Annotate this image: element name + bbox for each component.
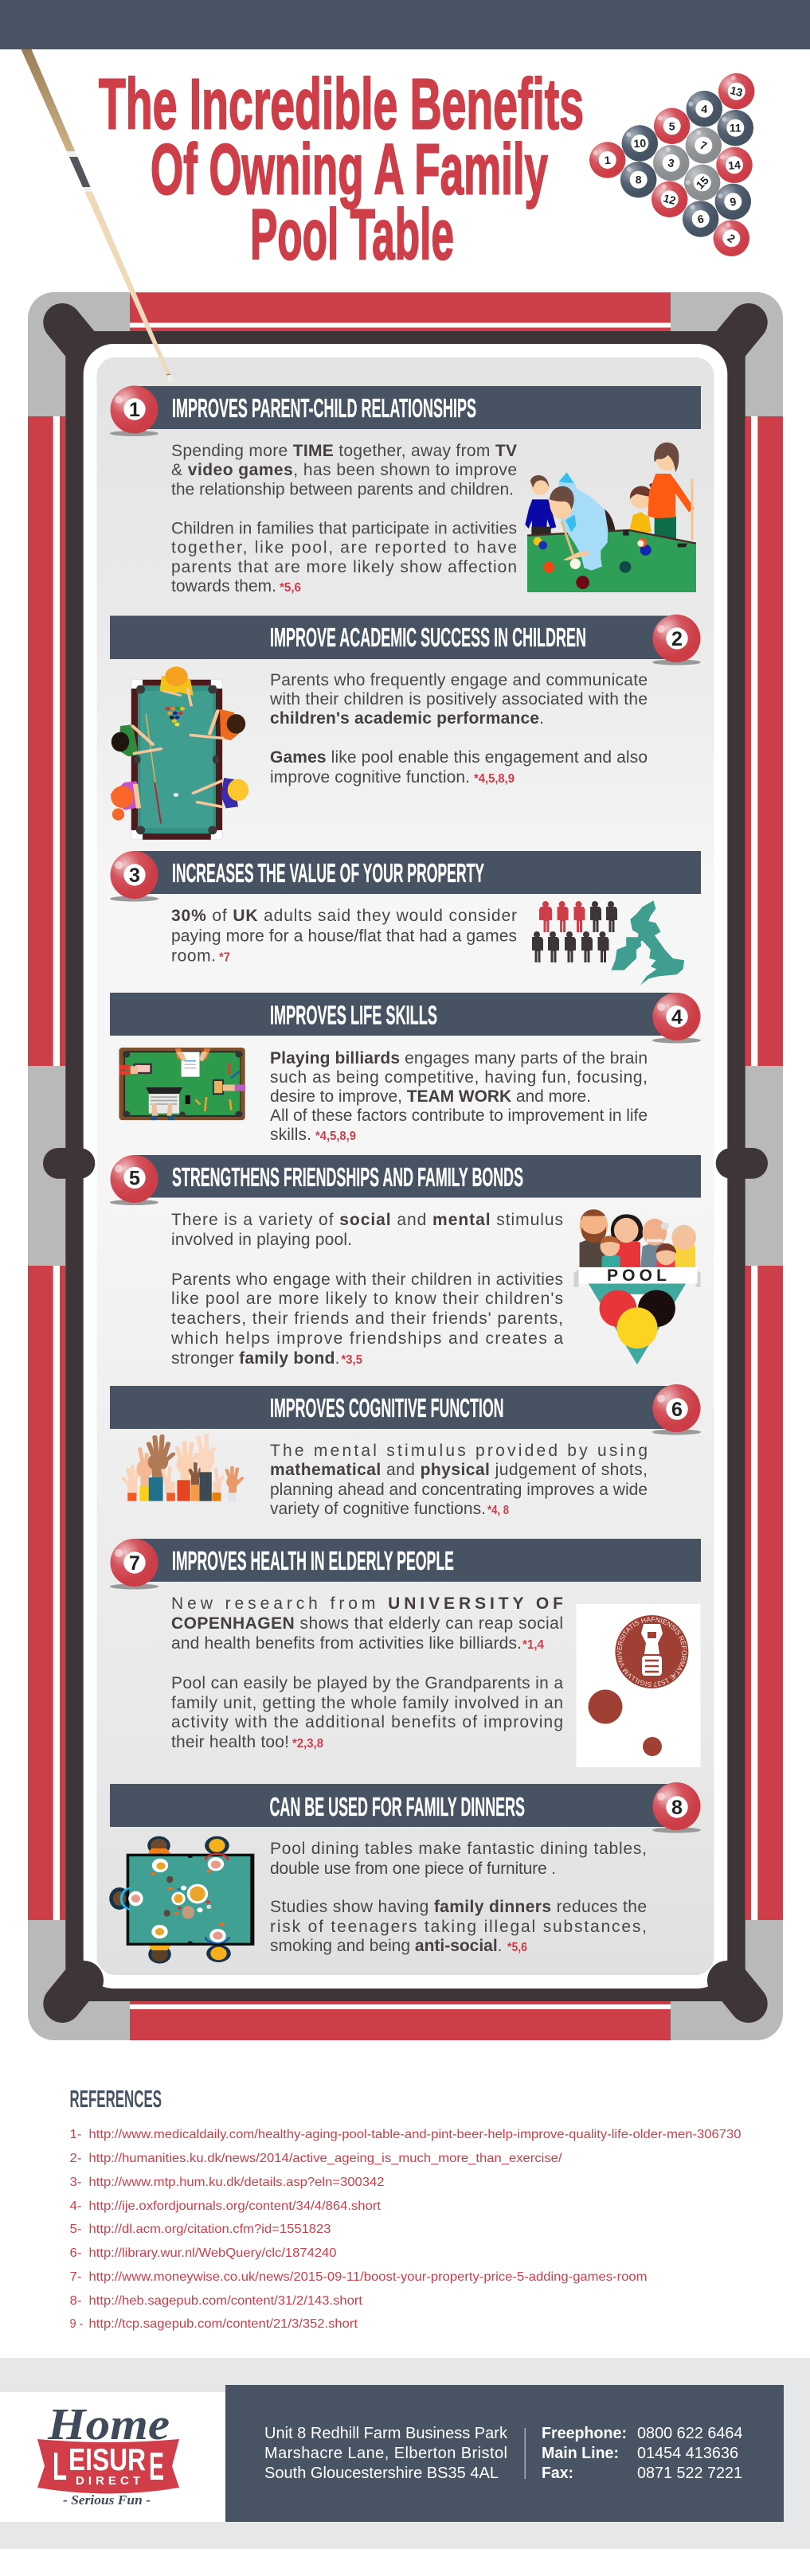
icon: ten people, three highlighted xyxy=(532,901,617,962)
text block: section 7 copy: family unit, getting the whole family involved in an xyxy=(171,1694,563,1712)
text block: section 2 copy: improve cognitive function. xyxy=(270,768,470,786)
icon: rack of fifteen pool balls: 8 xyxy=(636,174,642,186)
logo: Home Leisure Direct: - Serious Fun - xyxy=(63,2492,151,2508)
icon: rack of fifteen pool balls: 9 xyxy=(729,195,738,209)
text block: section 5 copy: stronger family bond. xyxy=(171,1349,339,1368)
text block: section 2 copy xyxy=(269,671,648,786)
text block: section 1 copy: towards them. xyxy=(171,577,276,595)
icon: rack of fifteen pool balls: 14 xyxy=(728,158,742,172)
text block: section 5 copy xyxy=(170,1211,563,1368)
heading bar 7 xyxy=(134,1539,701,1582)
heading bar 1: IMPROVES PARENT-CHILD RELATIONSHIPS xyxy=(172,393,476,423)
panel: pool table frame xyxy=(28,292,783,2040)
references list: 4- xyxy=(70,2199,81,2213)
text block: section 7 copy: *2,3,8 xyxy=(292,1737,323,1751)
text block: section 5 copy: which helps improve friendships and creates a xyxy=(170,1329,563,1348)
text block: section 5 copy: like pool are more likely to know their children's xyxy=(171,1290,563,1308)
references list: 1- xyxy=(70,2128,81,2141)
text block: section 5 copy: teachers, their friends and their friends' parents, xyxy=(171,1309,563,1328)
heading bar 3 xyxy=(134,851,701,894)
text block: section 2 copy: *4,5,8,9 xyxy=(474,772,515,786)
phone numbers: 0800 622 6464 xyxy=(637,2425,742,2442)
icon: ball 2 xyxy=(652,615,701,665)
icon: ball 5: 5 xyxy=(129,1167,140,1189)
references list: 7- xyxy=(70,2270,81,2284)
logo: Home Leisure Direct xyxy=(0,2392,225,2522)
icon: rack of fifteen pool balls: 3 xyxy=(667,156,676,170)
references xyxy=(70,2085,742,2331)
references list: 5- xyxy=(70,2223,81,2236)
icon: ball 6 xyxy=(652,1384,701,1434)
text block: section 6 copy xyxy=(270,1442,648,1518)
address: Unit 8 Redhill Farm Business Park xyxy=(264,2425,508,2442)
logo: Home Leisure Direct: E xyxy=(149,2445,164,2488)
text block: section 5 copy: *3,5 xyxy=(341,1353,362,1367)
text block: section 7 copy: COPENHAGEN shows that elderly can reap social xyxy=(171,1614,563,1633)
top banner bar xyxy=(0,0,810,49)
illustration: working on a pool table xyxy=(119,1048,245,1120)
text block: section 7 copy: and health benefits from activities like billiards. xyxy=(171,1634,522,1653)
heading bar 6 xyxy=(110,1386,677,1429)
phone numbers: 0871 522 7221 xyxy=(637,2465,742,2482)
icon: rack of fifteen pool balls: 12 xyxy=(662,192,677,207)
references list: http://www.medicaldaily.com/healthy-aging-pool-table-and-pint-beer-help-improve-quality-life-older-men-306730 xyxy=(89,2128,742,2141)
text block: section 7 copy: Pool can easily be played by the Grandparents in a xyxy=(171,1674,563,1692)
text block: section 4 copy: Playing billiards engages many parts of the brain xyxy=(270,1049,648,1067)
footer xyxy=(0,2358,810,2549)
text block: section 7 copy: activity with the additional benefits of improving xyxy=(171,1713,563,1731)
icon: rack of fifteen pool balls: 10 xyxy=(633,137,647,150)
references list: 2- xyxy=(70,2152,81,2165)
icon: rack of fifteen pool balls: 4 xyxy=(701,102,708,115)
illustration: family dining at pool table xyxy=(109,1836,254,1964)
references list: 6- xyxy=(70,2246,81,2260)
panel: section 4 life skills xyxy=(110,993,701,1144)
text block: section 5 copy: involved in playing pool. xyxy=(171,1231,352,1249)
references list: http://ije.oxfordjournals.org/content/34/4/864.short xyxy=(89,2199,382,2213)
icon: ball 6: 6 xyxy=(671,1399,683,1421)
contact panel xyxy=(225,2385,784,2522)
text block: section 7 copy: New research from UNIVERSITY OF xyxy=(171,1594,563,1613)
address: Marshacre Lane, Elberton Bristol xyxy=(264,2445,507,2462)
icon: ball 2: 2 xyxy=(671,628,683,650)
text block: section 7 copy xyxy=(171,1594,563,1751)
text block: section 6 copy: *4, 8 xyxy=(487,1504,509,1517)
address xyxy=(264,2425,508,2482)
icon: ball 3: 3 xyxy=(129,865,140,887)
icon: rack of fifteen pool balls: 15 xyxy=(694,174,711,191)
heading bar 1 xyxy=(134,386,701,429)
icon: ball 7 xyxy=(110,1539,158,1589)
text block: section 7 copy: *1,4 xyxy=(522,1638,544,1652)
references list: http://humanities.ku.dk/news/2014/active_ageing_is_much_more_than_exercise/ xyxy=(89,2152,562,2165)
illustration: raised hands xyxy=(123,1435,242,1501)
label: POOL: POOL xyxy=(607,1267,667,1285)
icon: rack of fifteen pool balls: 5 xyxy=(669,119,675,132)
text block: section 2 copy: Parents who frequently engage and communicate xyxy=(270,671,648,689)
phone numbers: 01454 413636 xyxy=(637,2445,738,2462)
icon: pool cue xyxy=(21,49,174,382)
icon: University of Copenhagen seal: SIGILLVM VNIVERSITATIS HAFNIENSIS REFORMATÆ 1537 xyxy=(616,1617,687,1687)
text block: section 1 copy: the relationship between parents and children. xyxy=(171,481,514,498)
icon: ball 4: 4 xyxy=(671,1006,683,1028)
heading bar 8: CAN BE USED FOR FAMILY DINNERS xyxy=(269,1792,525,1821)
logo: Home Leisure Direct: Home xyxy=(47,2400,170,2449)
text block: section 8 copy: Studies show having family dinners reduces the xyxy=(270,1898,647,1916)
logo: Home Leisure Direct: EISUR xyxy=(68,2443,146,2477)
icon: rack of fifteen pool balls: 6 xyxy=(696,212,705,226)
text block: section 4 copy: All of these factors contribute to improvement in life xyxy=(270,1107,648,1125)
illustration: top view of family around pool table xyxy=(110,666,248,840)
text block: section 4 copy: such as being competitive, having fun, focusing, xyxy=(270,1068,648,1087)
heading bar 3: INCREASES THE VALUE OF YOUR PROPERTY xyxy=(172,858,484,888)
icon: ball 4 xyxy=(652,993,701,1043)
text block: section 3 copy: 30% of UK adults said they would consider xyxy=(171,907,517,925)
text block: section 3 copy: paying more for a house/flat that had a games xyxy=(171,927,517,946)
icon: rack of fifteen pool balls: 11 xyxy=(730,122,742,135)
text block: section 8 copy: risk of teenagers taking illegal substances, xyxy=(270,1918,647,1936)
references list: http://library.wur.nl/WebQuery/clc/1874240 xyxy=(89,2246,337,2260)
address: South Gloucestershire BS35 4AL xyxy=(264,2465,499,2482)
text block: section 7 copy: their health too! xyxy=(171,1733,289,1751)
text block: section 6 copy: mathematical and physical judgement of shots, xyxy=(270,1461,648,1479)
icon: ball 1: 1 xyxy=(129,399,140,421)
illustration: family playing pool xyxy=(525,443,696,592)
logo: Home Leisure Direct: L xyxy=(53,2445,67,2488)
panel: section 1 parent-child relationships xyxy=(110,385,701,595)
text block: section 8 copy: Pool dining tables make fantastic dining tables, xyxy=(270,1840,647,1858)
text block: section 1 copy: parents that are more likely show affection xyxy=(171,558,517,576)
references list: 3- xyxy=(70,2176,81,2189)
icon: rack of fifteen pool balls xyxy=(589,73,754,256)
text block: section 4 copy: *4,5,8,9 xyxy=(315,1130,356,1143)
illustration: family with pool logo xyxy=(573,1209,701,1364)
icon: ball 1 xyxy=(110,385,158,436)
text block: section 4 copy: desire to improve, TEAM WORK and more. xyxy=(270,1087,591,1106)
panel: section 7 elderly health xyxy=(110,1539,701,1767)
heading bar 4: IMPROVES LIFE SKILLS xyxy=(270,1000,437,1030)
heading bar 8 xyxy=(110,1784,677,1827)
references list: http://www.moneywise.co.uk/news/2015-09-11/boost-your-property-price-5-adding-games-room xyxy=(89,2270,647,2284)
text block: section 3 copy xyxy=(171,907,517,966)
icon: ball 8: 8 xyxy=(671,1797,683,1819)
text block: section 8 copy: *5,6 xyxy=(507,1941,527,1954)
title: Pool Table xyxy=(250,196,454,275)
heading bar 7: IMPROVES HEALTH IN ELDERLY PEOPLE xyxy=(172,1546,454,1575)
icon: rack of fifteen pool balls: 13 xyxy=(729,84,744,99)
text block: section 6 copy: variety of cognitive functions. xyxy=(270,1500,486,1518)
text block: section 2 copy: children's academic performance. xyxy=(270,709,544,728)
icon: ball 5 xyxy=(110,1155,158,1205)
panel: section 2 academic success xyxy=(110,615,701,840)
icon: rack of fifteen pool balls: 7 xyxy=(698,139,709,153)
references list xyxy=(70,2128,742,2331)
text block: section 8 copy xyxy=(270,1840,647,1955)
icon: ball 7: 7 xyxy=(129,1552,140,1575)
heading bar 5 xyxy=(134,1155,701,1197)
references list: http://heb.sagepub.com/content/31/2/143.short xyxy=(89,2294,363,2308)
text block: section 4 copy: skills. xyxy=(270,1126,311,1144)
text block: section 3 copy: room. xyxy=(171,947,216,966)
text block: section 1 copy xyxy=(171,442,517,595)
icon: ball 3 xyxy=(110,851,158,901)
text block: section 6 copy: planning ahead and concentrating improves a wide xyxy=(270,1481,648,1499)
text block: section 5 copy: Parents who engage with their children in activities xyxy=(171,1270,563,1289)
references list: http://dl.acm.org/citation.cfm?id=1551823 xyxy=(89,2223,331,2236)
references list: 8- xyxy=(70,2294,81,2308)
panel: section 3 property value xyxy=(110,851,701,985)
references heading: REFERENCES xyxy=(70,2085,162,2113)
text block: section 8 copy: double use from one piece of furniture . xyxy=(270,1860,556,1878)
references list: http://www.mtp.hum.ku.dk/details.asp?eln=300342 xyxy=(89,2176,385,2189)
phone numbers: Fax: xyxy=(542,2465,573,2482)
phone numbers xyxy=(542,2425,742,2482)
icon: University of Copenhagen seal xyxy=(577,1604,701,1767)
text block: section 1 copy: Spending more TIME together, away from TV xyxy=(171,442,517,460)
references list: http://tcp.sagepub.com/content/21/3/352.short xyxy=(89,2317,358,2331)
text block: section 1 copy: *5,6 xyxy=(280,581,301,595)
text block: section 6 copy: The mental stimulus provided by using xyxy=(270,1442,648,1460)
text block: section 5 copy: There is a variety of social and mental stimulus xyxy=(171,1211,563,1229)
title: Of Owning A Family xyxy=(151,131,548,210)
text block: section 2 copy: Games like pool enable this engagement and also xyxy=(270,748,648,767)
logo: Home Leisure Direct: DIRECT xyxy=(76,2474,140,2488)
panel: section 5 friendships and family bonds xyxy=(110,1155,701,1368)
text block: section 2 copy: with their children is positively associated with the xyxy=(269,690,648,708)
icon: rack of fifteen pool balls: 2 xyxy=(726,232,738,245)
text block: section 1 copy: together, like pool, are reported to have xyxy=(171,539,517,557)
text block: section 8 copy: smoking and being anti-social. xyxy=(270,1937,502,1955)
text block: section 4 copy xyxy=(270,1049,648,1144)
icon: map of UK and Ireland xyxy=(611,900,684,985)
heading bar 6: IMPROVES COGNITIVE FUNCTION xyxy=(270,1393,503,1423)
panel: section 6 cognitive function xyxy=(110,1384,701,1518)
heading bar 5: STRENGTHENS FRIENDSHIPS AND FAMILY BONDS xyxy=(172,1162,523,1192)
text block: section 1 copy: & video games, has been shown to improve xyxy=(171,461,517,479)
icon: rack of fifteen pool balls: 1 xyxy=(604,154,611,166)
text block: section 1 copy: Children in families that participate in activities xyxy=(171,519,517,538)
title xyxy=(99,65,584,275)
heading bar 4 xyxy=(110,993,677,1036)
phone numbers: Freephone: xyxy=(542,2425,627,2442)
references list: 9 - xyxy=(70,2317,83,2331)
icon: ball 8 xyxy=(652,1782,701,1832)
panel: section 8 family dinners xyxy=(109,1782,701,1964)
phone numbers: Main Line: xyxy=(542,2445,619,2462)
text block: section 3 copy: *7 xyxy=(219,951,230,965)
heading bar 2 xyxy=(110,616,677,659)
